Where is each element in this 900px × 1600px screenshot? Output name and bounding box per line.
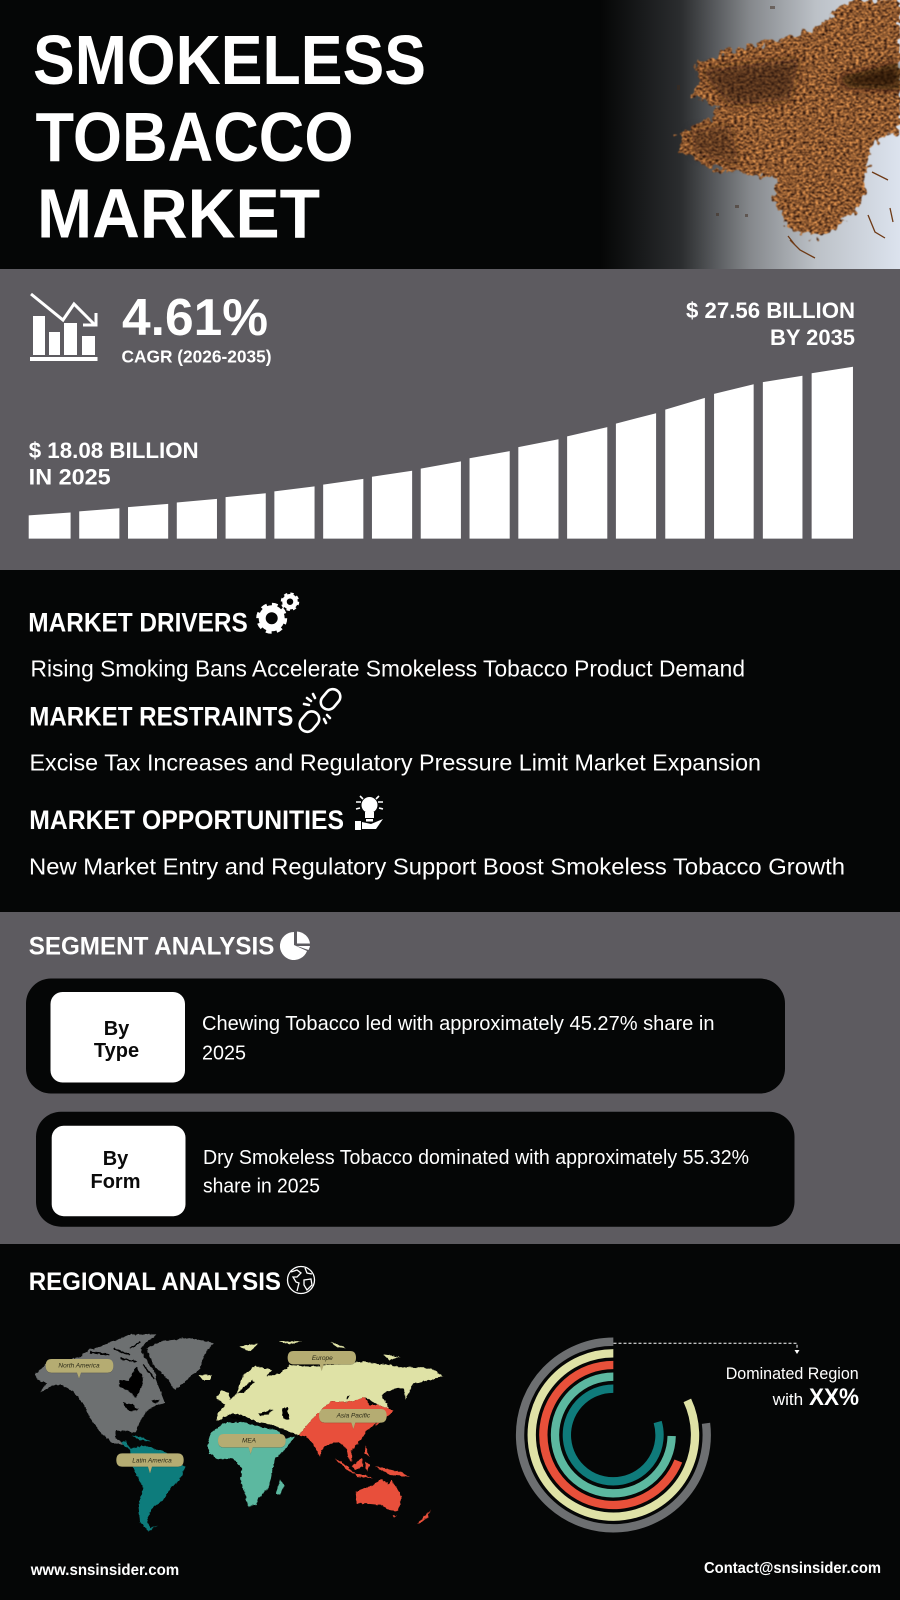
- CAGR value: 4.61%: [122, 289, 268, 347]
- icon: declining chart: [30, 294, 98, 361]
- panel: market size: [0, 269, 900, 570]
- callout: Europe: [288, 1351, 356, 1371]
- radial chart: [520, 1342, 707, 1528]
- title: SMOKELESS: [33, 21, 426, 99]
- region: Asia Pacific: [298, 1398, 431, 1523]
- title: [33, 21, 426, 252]
- callout: dominated region: XX%: [809, 1384, 859, 1411]
- callout: MEA: MEA: [242, 1438, 256, 1445]
- icon: gears: [258, 594, 298, 632]
- text: opportunity: New Market Entry and Regulatory Support Boost Smokeless Tobacco Growth: [29, 854, 845, 880]
- icon: lightbulb in hand: [355, 796, 383, 830]
- callout: Latin America: Latin America: [132, 1457, 172, 1464]
- heading: regional analysis: REGIONAL ANALYSIS: [29, 1268, 281, 1296]
- callout: Asia Pacific: Asia Pacific: [336, 1412, 371, 1419]
- heading: segment analysis: SEGMENT ANALYSIS: [29, 932, 274, 960]
- region: Latin America: [122, 1436, 185, 1531]
- CAGR label: CAGR (2026-2035): [122, 346, 272, 366]
- card: by form: [36, 1112, 794, 1227]
- text: by type: 2025: [202, 1042, 246, 1064]
- icon: pie chart: [280, 932, 310, 960]
- region: North America: [35, 1334, 213, 1444]
- label box: by form: Form: [90, 1171, 140, 1193]
- callout: Latin America: [116, 1453, 184, 1473]
- image: tobacco leaves: [677, 0, 900, 258]
- text: by type: [202, 1013, 714, 1064]
- text: by type: Chewing Tobacco led with approximately 45.27% share in: [202, 1013, 714, 1035]
- bar chart: [29, 367, 853, 539]
- panel: market dynamics: [0, 570, 900, 912]
- cutout: inner seas: [228, 1380, 351, 1420]
- callout: dominated region: Dominated Region: [726, 1365, 859, 1383]
- text: by form: Dry Smokeless Tobacco dominated with approximately 55.32%: [203, 1147, 749, 1169]
- title: MARKET: [37, 174, 320, 252]
- contact: Contact@snsinsider.com: [704, 1560, 881, 1577]
- heading: market opportunities: MARKET OPPORTUNITIES: [29, 805, 344, 835]
- label box: by form: By: [103, 1148, 129, 1170]
- card: by type: [26, 978, 785, 1094]
- callout: Asia Pacific: [319, 1409, 387, 1429]
- world map: [35, 1334, 443, 1531]
- icon: broken link: [297, 686, 343, 735]
- start value: $ 18.08 BILLION: [29, 438, 199, 463]
- region: Americas: [35, 1334, 213, 1531]
- text: by form: [203, 1147, 749, 1197]
- end value: [686, 298, 855, 350]
- website: www.snsinsider.com: [30, 1562, 179, 1579]
- start value: [29, 438, 199, 490]
- label box: by type: By: [104, 1018, 130, 1040]
- label box: by form: [52, 1126, 186, 1216]
- callout: MEA: [218, 1434, 286, 1454]
- callout: Europe: Europe: [312, 1355, 333, 1362]
- icon: globe: [288, 1266, 314, 1294]
- dashed leader arrow: [614, 1343, 800, 1354]
- label box: by type: [50, 992, 185, 1082]
- text: driver: Rising Smoking Bans Accelerate Smokeless Tobacco Product Demand: [30, 656, 745, 682]
- title: TOBACCO: [36, 98, 354, 176]
- panel: regional analysis: [0, 1244, 900, 1600]
- text: by form: share in 2025: [203, 1175, 320, 1197]
- callout: dominated region: with: [772, 1391, 803, 1409]
- callouts: [46, 1351, 387, 1473]
- cutout: Hudson Bay and lakes: [119, 1367, 160, 1411]
- panel: segment analysis: [0, 912, 900, 1244]
- callout: dominated region: [726, 1365, 859, 1411]
- panel: header background: [0, 0, 900, 269]
- end value: $ 27.56 BILLION: [686, 298, 855, 323]
- region: Europe and Russia: [199, 1341, 443, 1435]
- region: Middle East and Africa: [207, 1422, 295, 1507]
- heading: market drivers: MARKET DRIVERS: [28, 608, 248, 638]
- label box: by type: Type: [94, 1040, 139, 1062]
- text: restraint: Excise Tax Increases and Regulatory Pressure Limit Market Expansion: [30, 750, 761, 776]
- callout: North America: [46, 1359, 113, 1378]
- region: Eastern hemisphere: [199, 1341, 443, 1523]
- start value: IN 2025: [29, 465, 111, 490]
- callout: North America: North America: [58, 1363, 100, 1370]
- end value: BY 2035: [770, 325, 855, 350]
- heading: market restraints: MARKET RESTRAINTS: [29, 702, 293, 732]
